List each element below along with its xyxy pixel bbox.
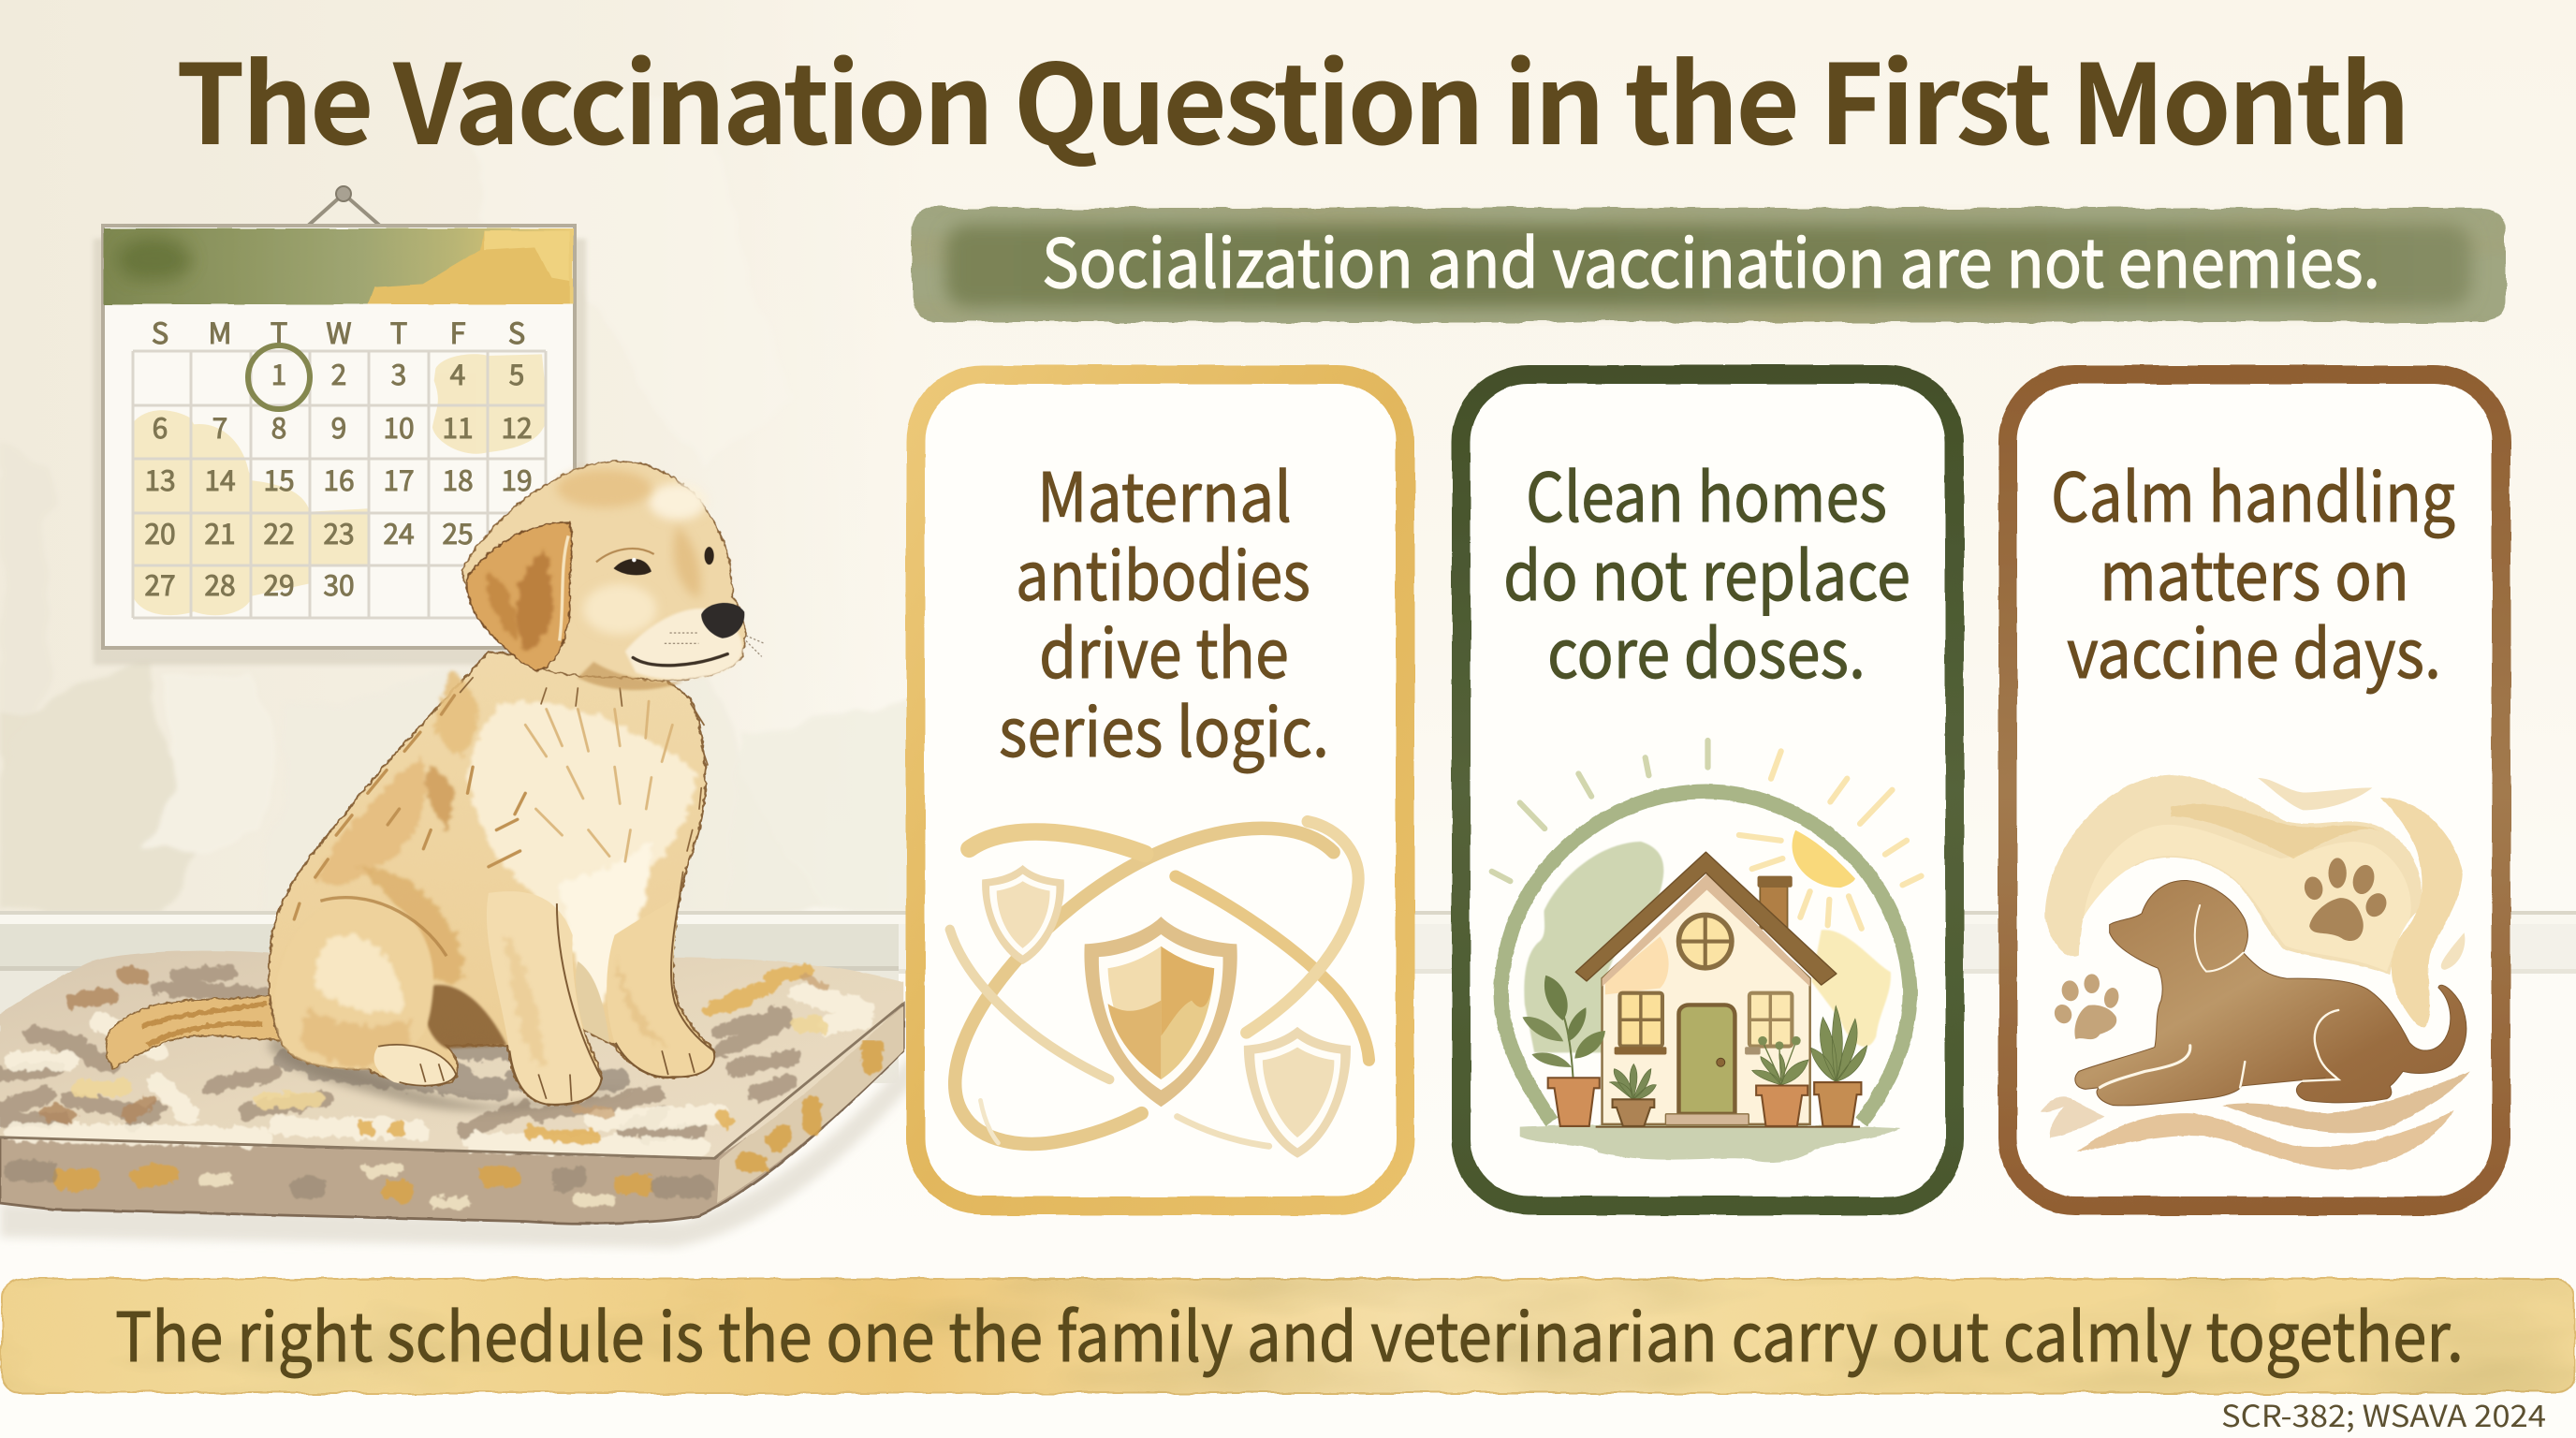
paw print small <box>2052 974 2120 1039</box>
calendar dates: 29 <box>263 563 295 604</box>
puppy body <box>269 652 714 1105</box>
calendar dates: 2 <box>331 352 346 393</box>
calendar dates: 13 <box>144 458 176 499</box>
chimney <box>1758 876 1793 929</box>
dog silhouette <box>2075 880 2466 1106</box>
swirl washes <box>2045 775 2465 1027</box>
roof <box>1575 852 1837 985</box>
puppy muzzle <box>625 609 742 680</box>
card 1 text: drive the <box>1039 599 1289 697</box>
calendar dates: 4 <box>450 352 465 393</box>
calendar dates: 15 <box>263 458 295 499</box>
puppy far front leg <box>607 893 714 1078</box>
puppy ear <box>467 522 572 671</box>
background washes <box>1524 842 1663 1052</box>
house wall <box>1603 882 1810 1124</box>
bed side pattern <box>16 1048 872 1203</box>
potted plant small left <box>1609 1064 1656 1126</box>
calendar dates: 14 <box>204 458 236 499</box>
puppy nose <box>701 603 744 638</box>
calendar dates: 6 <box>153 405 168 447</box>
calendar dates: 25 <box>442 511 474 552</box>
calendar weekdays: S <box>508 310 525 352</box>
calendar weekdays: T <box>390 310 407 352</box>
icon: shields and orbits <box>950 821 1368 1158</box>
door <box>1665 1005 1749 1125</box>
calendar header <box>104 228 573 304</box>
calendar weekdays: W <box>326 310 352 352</box>
calendar dates: 22 <box>263 511 295 552</box>
card 2 text <box>1503 443 1910 697</box>
card 1 text: Maternal <box>1037 443 1292 541</box>
card 1 frame <box>915 374 1405 1206</box>
calendar nail and string <box>307 186 381 227</box>
calendar dates: 10 <box>383 405 415 447</box>
title: The Vaccination Question in the First Month <box>176 16 2410 176</box>
top banner <box>912 208 2506 322</box>
dog light lines <box>2100 905 2338 1088</box>
icon: resting dog with paws <box>2041 775 2470 1170</box>
puppy eyes <box>596 547 714 575</box>
banner wash <box>945 225 2471 307</box>
puppy fur strokes <box>294 678 708 919</box>
calendar dates: 17 <box>383 458 415 499</box>
card 1: maternal antibodies <box>915 374 1405 1206</box>
baseboard <box>0 911 2576 1083</box>
calendar dates: 24 <box>383 511 415 552</box>
puppy <box>106 461 765 1111</box>
puppy head patches <box>557 470 707 690</box>
bed shadow <box>0 1050 914 1248</box>
calendar dates: 12 <box>501 405 533 447</box>
orbit rings <box>950 821 1368 1146</box>
calendar shadow <box>94 239 586 665</box>
puppy haunch <box>274 897 446 1069</box>
card 2 text: do not replace <box>1503 521 1910 620</box>
bed side right face <box>717 1006 903 1203</box>
calendar dates: 1 <box>271 352 286 393</box>
calendar circled date <box>248 345 310 409</box>
small shield bottom-right <box>1244 1027 1351 1158</box>
calendar dates: 28 <box>204 563 236 604</box>
puppy chest light <box>467 702 694 931</box>
sun rays <box>1492 741 1921 929</box>
bed side <box>0 1004 903 1224</box>
calendar dates: 11 <box>442 405 474 447</box>
puppy head <box>462 461 765 690</box>
calendar dates: 16 <box>323 458 355 499</box>
card 1 text: antibodies <box>1016 521 1310 620</box>
calendar dates: 18 <box>442 458 474 499</box>
card 1 text: series logic. <box>999 678 1329 776</box>
calendar weekdays: M <box>208 310 232 352</box>
calendar page <box>103 226 575 648</box>
puppy shadow on bed <box>268 1034 630 1111</box>
bed pattern <box>0 970 867 1148</box>
card 2 text: core doses. <box>1547 599 1866 697</box>
calendar dates: 8 <box>271 405 286 447</box>
calendar grid <box>133 351 546 618</box>
banner text: Socialization and vaccination are not enemies. <box>1042 209 2380 307</box>
calendar weekdays: T <box>271 310 287 352</box>
centre shield <box>1084 917 1237 1107</box>
card 3 frame <box>2008 374 2501 1206</box>
bed piping <box>0 1004 903 1158</box>
calendar dates: 21 <box>204 511 236 552</box>
bed top <box>0 951 903 1158</box>
calendar dates: 5 <box>509 352 524 393</box>
puppy whiskers <box>665 633 765 656</box>
card 1 text <box>999 443 1329 776</box>
card 3 text: Calm handling <box>2051 443 2455 541</box>
potted plant right back <box>1811 1005 1867 1126</box>
ground swooshes <box>2041 1071 2470 1170</box>
calendar <box>94 186 586 665</box>
right window <box>1745 993 1792 1054</box>
calendar dates: 7 <box>212 405 227 447</box>
left window <box>1615 993 1666 1054</box>
card 3 text <box>2051 443 2455 697</box>
small shield top-left <box>982 865 1064 964</box>
house eaves <box>1603 873 1810 987</box>
round window <box>1679 915 1732 968</box>
icon: house in sun dome <box>1492 741 1921 1162</box>
ground line <box>1596 1124 1860 1130</box>
paw print large <box>2303 858 2391 941</box>
calendar weekdays: S <box>152 310 168 352</box>
house peach wash <box>1605 936 1669 994</box>
puppy tail <box>106 995 286 1069</box>
ground <box>1520 1124 1900 1162</box>
calendar washes <box>133 354 547 615</box>
dome ring <box>1500 791 1910 1122</box>
card 2 text: Clean homes <box>1526 443 1887 541</box>
potted plant right front <box>1752 1036 1808 1126</box>
calendar dates: 27 <box>144 563 176 604</box>
calendar dates: 30 <box>323 563 355 604</box>
puppy near front leg <box>487 891 602 1105</box>
bottom banner wash <box>2 1279 2574 1393</box>
card 3: calm handling <box>2008 374 2501 1206</box>
calendar weekdays <box>152 310 525 352</box>
puppy back shading <box>315 672 477 983</box>
banner rim <box>912 208 2506 322</box>
calendar dates: 19 <box>501 458 533 499</box>
calendar dates: 23 <box>323 511 355 552</box>
calendar dates <box>144 352 533 604</box>
puppy belly gap <box>424 985 507 1049</box>
card 3 text: vaccine days. <box>2067 599 2441 697</box>
calendar dates: 9 <box>331 405 346 447</box>
potted plant tall left <box>1522 976 1605 1126</box>
card 2 frame <box>1461 374 1954 1206</box>
dog bed <box>0 951 914 1248</box>
puppy mouth <box>633 654 727 666</box>
card 3 text: matters on <box>2100 521 2409 620</box>
calendar dates: 20 <box>144 511 176 552</box>
calendar dates: 3 <box>391 352 406 393</box>
bottom banner <box>2 1279 2574 1393</box>
puppy hind paw <box>374 1045 456 1086</box>
sun <box>1793 830 1855 888</box>
calendar weekdays: F <box>449 310 466 352</box>
card 2: clean homes <box>1461 374 1954 1206</box>
source credit: SCR-382; WSAVA 2024 <box>2221 1393 2546 1436</box>
